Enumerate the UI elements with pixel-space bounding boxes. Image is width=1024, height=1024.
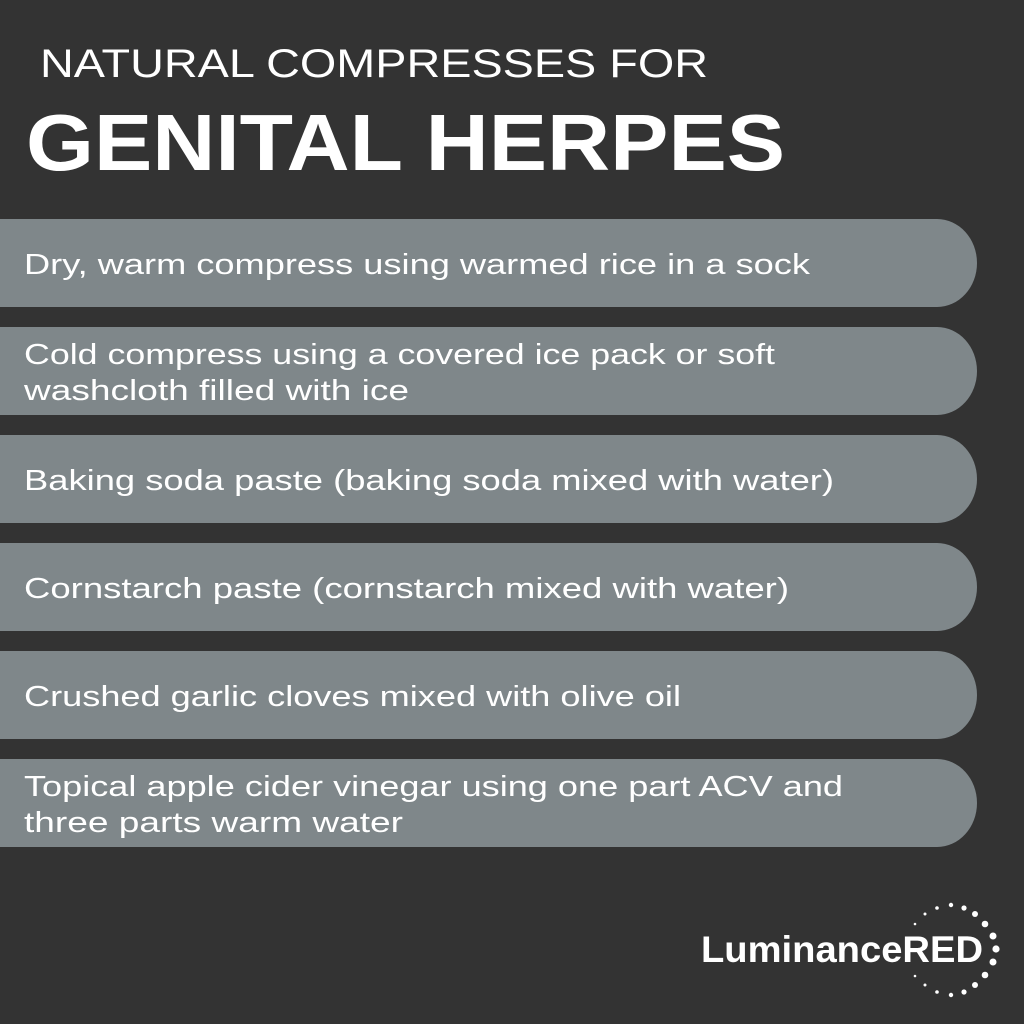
item 6 (0, 759, 977, 847)
title: NATURAL COMPRESSES FOR (40, 42, 708, 86)
item 1: Dry, warm compress using warmed rice in a sock (24, 249, 811, 281)
item 2: Cold compress using a covered ice pack or soft (24, 339, 775, 371)
item 3 (0, 435, 977, 523)
icon: dotted arc (914, 903, 1000, 997)
item 2: washcloth filled with ice (23, 375, 409, 407)
list of compresses (0, 219, 977, 847)
item 1 (0, 219, 977, 307)
logo (701, 903, 1000, 997)
item 5 (0, 651, 977, 739)
item 3: Baking soda paste (baking soda mixed with water) (24, 465, 834, 497)
item 5: Crushed garlic cloves mixed with olive oil (24, 681, 681, 713)
item 4 (0, 543, 977, 631)
item 2 (0, 327, 977, 415)
item 6: three parts warm water (24, 807, 403, 839)
item 4: Cornstarch paste (cornstarch mixed with water) (24, 573, 789, 605)
title: GENITAL HERPES (26, 98, 785, 187)
title (26, 42, 785, 187)
item 6: Topical apple cider vinegar using one part ACV and (24, 771, 843, 803)
logo: LuminanceRED (701, 929, 983, 970)
